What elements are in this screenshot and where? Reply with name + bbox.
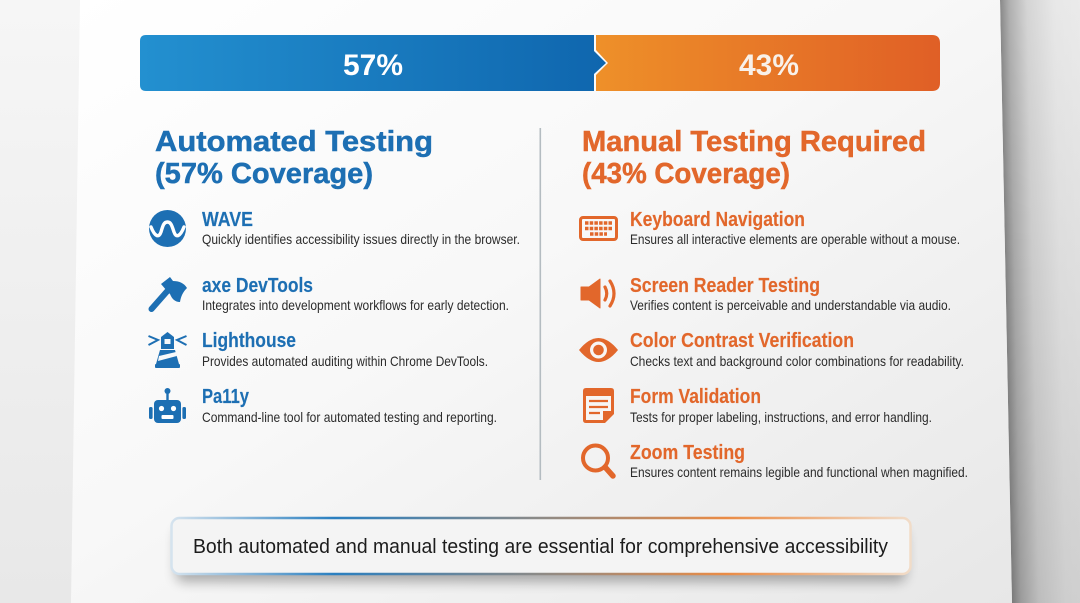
icon: wave [149,210,186,247]
item: axe DevTools [152,275,509,313]
column divider [540,128,541,480]
panel: manual testing required [579,126,968,480]
item: Lighthouse [148,330,488,369]
panel: automated testing [148,126,520,425]
check description: Verifies content is perceivable and understandable via audio. [630,297,951,313]
icon: keyboard [580,218,616,240]
item: Zoom Testing [583,442,968,480]
heading: automated testing [155,126,433,190]
callout [172,518,910,582]
percentage bar [140,35,940,91]
tool name: Lighthouse [202,330,296,352]
label: 43%: 43% [739,49,799,82]
icon: axe [152,277,187,309]
check description: Ensures all interactive elements are operable without a mouse. [630,231,960,247]
check description: Ensures content remains legible and functional when magnified. [630,464,968,480]
tool description: Quickly identifies accessibility issues directly in the browser. [202,231,520,247]
item: WAVE [149,209,520,247]
label: 57%: 57% [343,49,403,82]
item: Keyboard Navigation [580,209,960,247]
heading: manual testing required: Manual Testing Required [582,126,926,158]
icon: lighthouse [148,332,186,368]
check name: Screen Reader Testing [630,275,820,297]
tool description: Integrates into development workflows for early detection. [202,297,509,313]
heading: manual testing required: (43% Coverage) [582,158,790,190]
icon: speaker [581,279,614,308]
check name: Form Validation [630,386,761,408]
heading: automated testing: (57% Coverage) [155,158,373,190]
item: Pa11y [149,386,497,425]
item: Form Validation [583,386,932,425]
bar segment: manual 43% [596,35,940,91]
check name: Zoom Testing [630,442,745,464]
tool name: WAVE [202,209,253,231]
tool description: Command-line tool for automated testing and reporting. [202,409,497,425]
check description: Tests for proper labeling, instructions, and error handling. [630,409,932,425]
check description: Checks text and background color combinations for readability. [630,353,964,369]
item: Color Contrast Verification [579,330,964,369]
item: Screen Reader Testing [581,275,951,313]
icon: magnifier [583,446,613,476]
check name: Color Contrast Verification [630,330,854,352]
heading: manual testing required [582,126,926,190]
icon: eye [579,338,618,362]
tool description: Provides automated auditing within Chrome DevTools. [202,353,488,369]
callout text: Both automated and manual testing are essential for comprehensive accessibility [193,536,888,558]
icon: robot [149,388,186,423]
tool name: axe DevTools [202,275,313,297]
check name: Keyboard Navigation [630,209,805,231]
tool name: Pa11y [202,386,250,408]
heading: automated testing: Automated Testing [155,126,433,158]
bar segment: automated 57% [140,35,606,91]
icon: form [583,388,614,423]
